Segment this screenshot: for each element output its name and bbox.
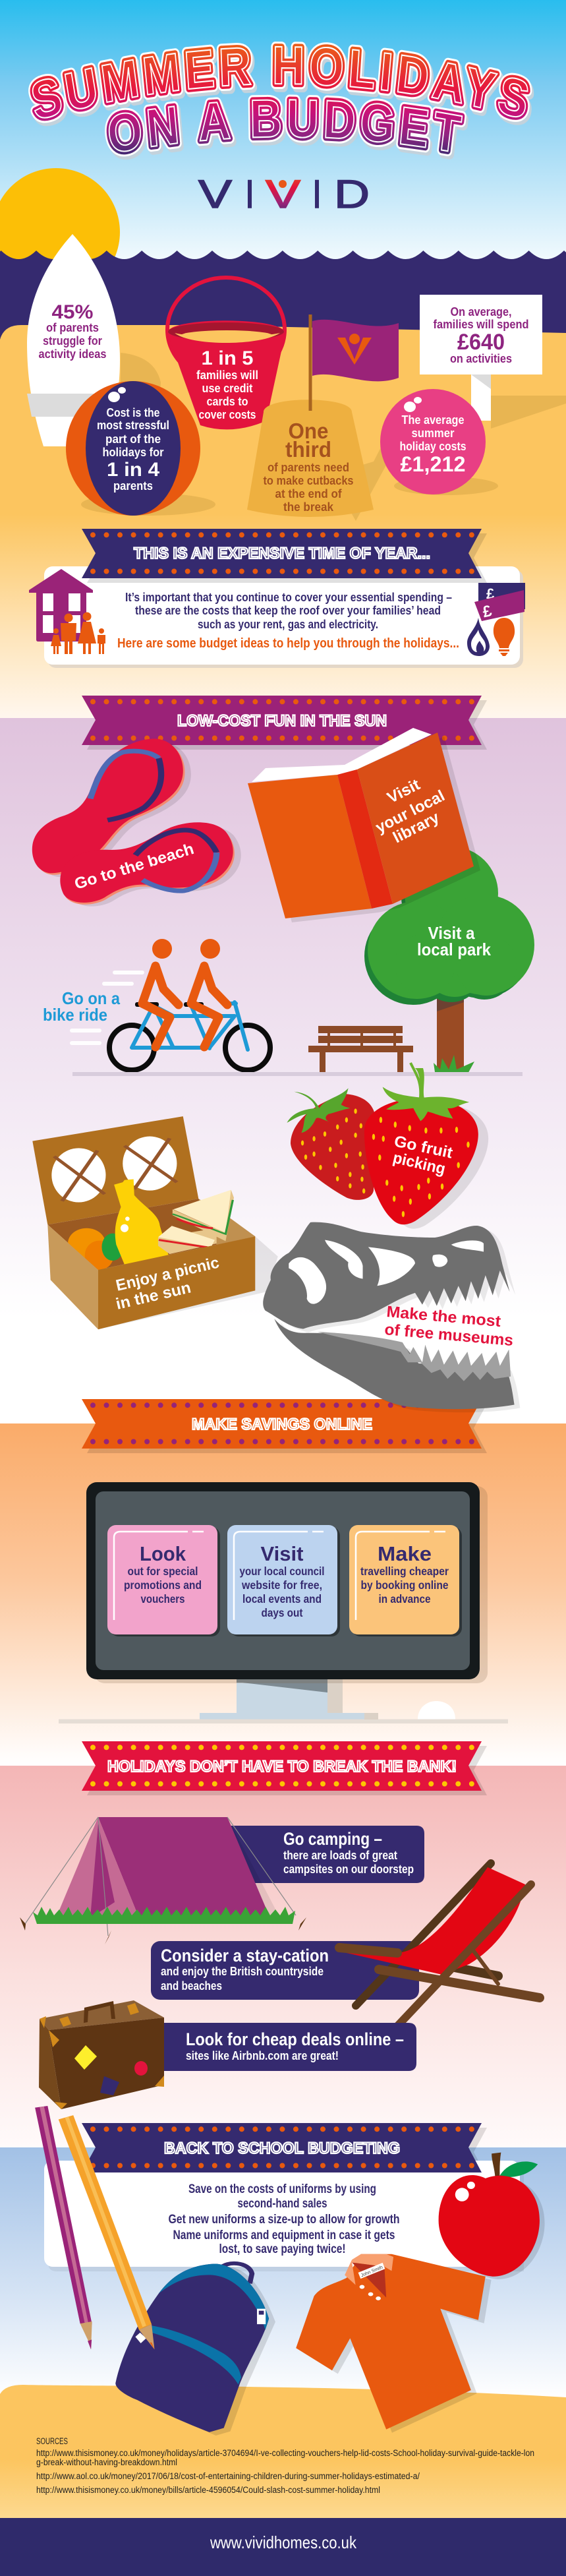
tent	[20, 1817, 306, 1944]
icon: family	[51, 612, 105, 654]
banner: this is an expensive time of year	[82, 529, 487, 583]
dinosaur skull	[263, 1222, 520, 1412]
sources: http://www.thisismoney.co.uk/money/bills/article-4596054/Could-slash-cost-summer-holiday.html	[36, 2485, 380, 2495]
text: uniform tips: second-hand sales	[237, 2197, 327, 2211]
text: uniform tips: Name uniforms and equipment in case it gets	[173, 2229, 395, 2242]
signpost with stat	[420, 295, 566, 429]
frame	[132, 1002, 248, 1050]
text: free museums: Make the most	[385, 1303, 501, 1331]
text: 45% of parents	[38, 301, 107, 361]
text: essential spending	[117, 591, 459, 651]
wheels	[109, 1025, 270, 1070]
panel: essential spending	[29, 566, 525, 668]
card: visit: days out	[261, 1606, 303, 1619]
text: average summer holiday	[399, 413, 467, 476]
apple	[439, 2153, 545, 2279]
callout: stay-cation: and enjoy the British countryside	[161, 1965, 324, 1978]
tree trunk	[437, 996, 464, 1072]
text: cost is the most stressful: Cost is the	[107, 406, 159, 419]
banner: back to school budgeting: BACK TO SCHOOL BUDGETING	[164, 2140, 400, 2157]
banner: low-cost fun in the sun: LOW-COST FUN IN THE SUN	[177, 712, 387, 730]
banner: back to school budgeting	[44, 2123, 524, 2271]
text: cost is the most stressful: most stressful	[97, 419, 169, 432]
icon: lightbulb	[494, 618, 515, 656]
text: on average: on activities	[450, 352, 512, 365]
logo: Vivid	[198, 172, 370, 216]
riders	[142, 966, 227, 1047]
backpack	[115, 2263, 275, 2436]
sources: g-break-without-having-breakdown.html	[36, 2457, 177, 2467]
tandem bike ride	[43, 939, 270, 1070]
text: on average: families will spend	[434, 318, 528, 331]
navy wave band	[0, 251, 566, 369]
icon: flame	[467, 618, 490, 656]
title: SUMMER HOLIDAYS	[28, 42, 534, 127]
banner: low-cost fun in the sun	[82, 696, 487, 750]
name tag	[358, 2263, 385, 2279]
section background: low-cost fun	[0, 718, 566, 1423]
beach ball with stat	[66, 381, 215, 516]
banner: holidays don't have to break the bank	[82, 1741, 487, 1795]
callout: cheap deals: sites like Airbnb.com are great!	[186, 2049, 339, 2062]
card: look: out for special	[128, 1565, 198, 1578]
text: on average	[434, 305, 528, 365]
callout: go camping: there are loads of great	[283, 1849, 397, 1862]
sources: http://www.aol.co.uk/money/2017/06/18/cost-of-entertaining-children-during-summer-holidays-estimated-a/	[36, 2471, 420, 2481]
text: 45% of parents: struggle for	[43, 334, 102, 347]
section background: holidays	[0, 1766, 566, 2147]
callout: go camping: Go camping –	[283, 1829, 382, 1849]
footer bar	[0, 2518, 566, 2576]
card: look: promotions and	[124, 1578, 202, 1592]
card: make: travelling cheaper	[360, 1565, 449, 1578]
text: cost is the most stressful: holidays for	[103, 446, 163, 459]
card: visit: Visit	[261, 1542, 303, 1565]
text: one third of parents: to make cutbacks	[264, 474, 353, 487]
callout: stay-cation: Consider a stay-cation	[161, 1946, 329, 1965]
strawberry stem	[410, 1063, 420, 1098]
flip flops	[32, 738, 241, 907]
mouse	[418, 1701, 455, 1720]
text: go fruit picking	[391, 1132, 454, 1178]
text: average summer holiday: summer	[411, 427, 455, 440]
sources: SOURCES	[36, 2436, 68, 2446]
text: one third of parents: the break	[283, 500, 334, 514]
text: cost is the most stressful: part of the	[105, 433, 161, 446]
text: enjoy a picnic	[114, 1254, 221, 1313]
text: one third of parents: of parents need	[268, 461, 349, 474]
banner: make savings online	[82, 1399, 487, 1453]
text: go on a bike ride: bike ride	[43, 1005, 107, 1025]
picnic basket	[32, 1116, 278, 1329]
banner: holidays don't have to break the bank: HOLIDAYS DON’T HAVE TO BREAK THE BANK!	[107, 1758, 457, 1776]
stickers	[74, 2045, 97, 2070]
card: look: vouchers	[141, 1592, 185, 1605]
flag logo	[337, 338, 372, 365]
text: visit a local park: local park	[417, 940, 491, 959]
orange pencil	[59, 2115, 154, 2349]
text: visit your local library: library	[390, 808, 443, 847]
text: enjoy a picnic: Enjoy a picnic	[114, 1254, 221, 1295]
bench	[308, 1026, 413, 1074]
text: visit your local library: your local	[373, 787, 448, 837]
polo shirt	[296, 2254, 492, 2433]
title: ON A BUDGET	[105, 95, 468, 160]
text: 1 in 5 families	[196, 347, 258, 421]
icon: banknotes: £	[481, 602, 494, 621]
text: uniform tips: Save on the costs of uniforms by using	[188, 2182, 376, 2196]
card: visit: your local council	[240, 1565, 324, 1578]
text: one third of parents: One	[289, 419, 328, 443]
text: 1 in 5 families: cover costs	[199, 408, 256, 421]
logo: Vivid: V	[198, 172, 232, 216]
text: cost is the most stressful	[97, 406, 169, 493]
text: visit a local park: Visit a	[428, 923, 475, 943]
text: essential spending: Here are some budget ideas to help you through the holidays...	[117, 636, 459, 651]
callout: go camping	[224, 1826, 424, 1883]
text: one third of parents: at the end of	[275, 487, 342, 500]
text: 1 in 5 families: 1 in 5	[202, 347, 253, 369]
text: go to the beach: Go to the beach	[72, 840, 196, 893]
text: one third of parents: third	[285, 437, 331, 462]
card: make: by booking online	[361, 1578, 449, 1592]
text: go on a bike ride	[43, 988, 120, 1025]
sun	[0, 168, 120, 296]
text: cost is the most stressful: 1 in 4	[107, 459, 159, 481]
text: essential spending: It’s important that you continue to cover your essential spending –	[125, 591, 452, 604]
logo: Vivid: I	[245, 172, 254, 216]
computer monitor	[59, 1482, 508, 1723]
card: look: Look	[140, 1542, 186, 1565]
sky background	[0, 0, 566, 280]
title: ON A BUDGET	[107, 96, 465, 154]
callout: cheap deals	[158, 2023, 416, 2071]
sandcastle with flag and stat	[247, 315, 399, 521]
icon: house	[29, 569, 93, 642]
text: 1 in 5 families: use credit	[202, 382, 253, 395]
text: free museums: of free museums	[383, 1321, 514, 1350]
text: one third of parents	[264, 419, 353, 514]
text: go fruit picking: Go fruit	[393, 1132, 454, 1162]
logo: Vivid: V	[266, 172, 300, 216]
card: make: in advance	[378, 1592, 431, 1605]
suitcase	[39, 2000, 164, 2109]
sand beach	[0, 325, 566, 718]
text: cost is the most stressful: parents	[113, 479, 153, 493]
text: average summer holiday: £1,212	[401, 452, 465, 476]
card: make: Make	[378, 1542, 432, 1565]
text: uniform tips	[169, 2182, 399, 2256]
card: visit: local events and	[242, 1592, 322, 1605]
text: average summer holiday: The average	[402, 413, 464, 427]
text: on average: On average,	[451, 305, 511, 318]
bucket with stat	[167, 278, 285, 429]
text: essential spending: such as your rent, gas and electricity.	[198, 618, 378, 631]
callout: cheap deals: Look for cheap deals online –	[186, 2029, 404, 2049]
title: SUMMER HOLIDAYS	[30, 44, 530, 121]
text: 45% of parents: activity ideas	[38, 347, 107, 361]
callout: stay-cation	[151, 1941, 419, 2000]
text: enjoy a picnic: in the sun	[114, 1278, 192, 1313]
name tag: John Smith	[360, 2265, 383, 2278]
text: visit your local library: Visit	[384, 775, 423, 807]
text: visit a local park	[417, 923, 491, 959]
card: look	[107, 1525, 220, 1636]
card: make	[349, 1525, 462, 1636]
tree foliage	[364, 850, 531, 1005]
text: go fruit picking: picking	[391, 1149, 447, 1178]
grass	[33, 1907, 295, 1924]
flag	[312, 320, 399, 381]
text: 1 in 5 families: cards to	[207, 395, 248, 408]
text: 45% of parents: 45%	[51, 301, 94, 323]
title: ON A BUDGET	[108, 99, 463, 152]
icon: banknotes: £	[486, 585, 495, 602]
tent pegs	[20, 1917, 306, 1944]
monitor stand	[59, 1679, 508, 1723]
strawberries	[287, 1063, 488, 1229]
logo: Vivid: I	[312, 172, 322, 216]
text: uniform tips: lost, to save paying twice!	[219, 2242, 345, 2256]
grass tuft	[434, 1055, 474, 1076]
tree	[364, 847, 534, 1076]
card: visit	[227, 1525, 340, 1636]
section background: back to school	[0, 2147, 566, 2398]
text: 45% of parents: of parents	[46, 321, 99, 334]
icon: banknotes	[474, 583, 525, 621]
banner: make savings online: MAKE SAVINGS ONLINE	[192, 1416, 372, 1433]
bottom sand	[0, 2385, 566, 2518]
text: visit your local library	[373, 775, 448, 847]
text: on average: £640	[457, 330, 505, 355]
logo: Vivid: D	[334, 172, 370, 216]
footer url: www.vividhomes.co.uk	[210, 2532, 357, 2552]
pencils	[35, 2106, 154, 2349]
text: uniform tips: Get new uniforms a size-up to allow for growth	[169, 2213, 399, 2227]
sources	[36, 2436, 534, 2495]
card: visit: website for free,	[241, 1578, 322, 1592]
text: essential spending: these are the costs that keep the roof over your families’ head	[135, 604, 441, 617]
title: SUMMER HOLIDAYS	[32, 46, 528, 119]
banner: this is an expensive time of year: THIS IS AN EXPENSIVE TIME OF YEAR...	[134, 545, 430, 562]
purple pencil	[35, 2106, 92, 2349]
text: 1 in 5 families: families will	[196, 369, 258, 382]
deck chair	[339, 1863, 540, 2026]
book	[248, 728, 480, 922]
pink ball with stat	[380, 389, 498, 495]
ground line	[72, 1072, 523, 1076]
callout: stay-cation: and beaches	[161, 1979, 222, 1992]
surfboard with stat	[27, 234, 161, 446]
callout: go camping: campsites on our doorstep	[283, 1863, 414, 1876]
text: go on a bike ride: Go on a	[62, 988, 120, 1008]
speed lines	[72, 973, 142, 1043]
text: free museums	[383, 1303, 514, 1350]
section background: make savings	[0, 1423, 566, 1766]
text: average summer holiday: holiday costs	[399, 440, 467, 453]
